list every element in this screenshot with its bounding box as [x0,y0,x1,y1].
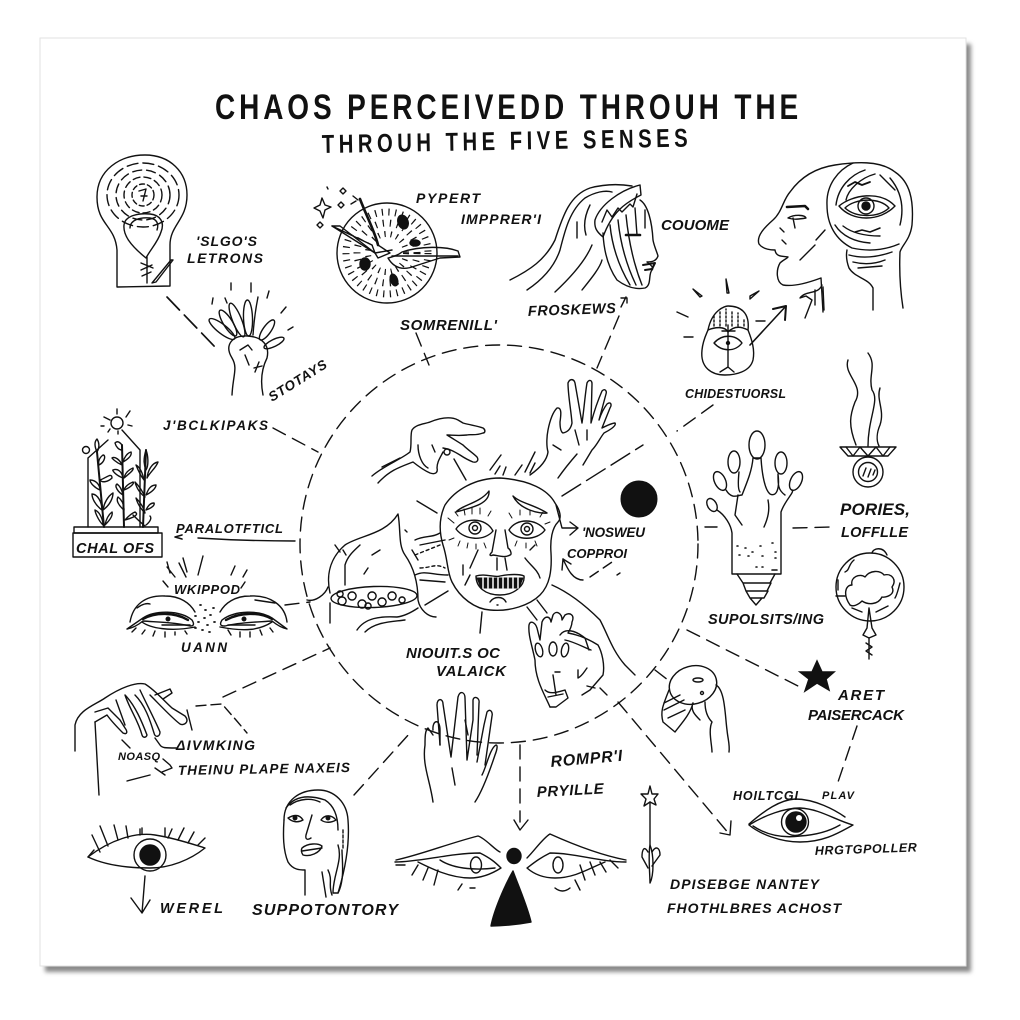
panel: plants in greenhouse [82,409,158,527]
label: pypert impprer'i [416,190,542,227]
icon: black star [800,661,834,691]
panel: twin eyes and triangle [395,834,626,926]
panel: dripping hand [705,431,805,605]
connector eyes to circle [285,602,310,605]
label: nioutit.soc valaick [406,645,507,680]
label: plav: PLAV [822,790,856,802]
label: pories, loffle [840,500,910,541]
label: supolsits/ing: SUPOLSITS/ING [708,612,824,628]
label: 'noswed coppro: 'NOSWEU [582,525,646,540]
connector left of hand [705,526,717,528]
connector chidestuorsl [677,405,713,431]
label box: chal ofs: CHAL OFS [76,541,154,557]
panel: lash eye [88,825,205,871]
panel: hand holding stone [662,660,729,752]
dashed central circle [300,345,698,743]
panel: open hand [424,693,497,802]
label: pories, loffle: PORIES, [840,500,910,519]
panel: big profile head with eye [758,163,912,318]
label: slgo's letrons: LETRONS [187,250,264,266]
panel: globe with cloud [836,549,904,659]
label: dpisebge nantey fhothlbres achost: DPISEBGE NANTEY [670,876,821,892]
label: pypert impprer'i: PYPERT [416,190,481,206]
panel: hand lower left [75,684,247,795]
panel: flower hand [207,283,293,395]
icon: black sun disc [621,481,657,517]
connector to star [687,630,800,687]
label: 'noswed coppro: COPPROI [567,546,627,561]
panel: top-left hand [372,418,485,483]
title: CHAOS PERCEIVEDD THROUH THE [215,87,798,127]
label: dpisebge nantey fhothlbres achost [667,876,842,916]
arrow: dashed down to central eyes [514,745,528,830]
arrow: dashed to eye [618,702,731,835]
arrow: froskews connector [597,297,627,368]
panel: bottom-right hands [527,585,635,707]
decorative rays around the face [417,445,643,633]
panel: smoke bowl [840,353,896,487]
panel: right eye [749,799,853,842]
label: j'bcklipaks: J'BCLKIPAKS [163,418,268,433]
panel: clock disc [314,187,460,303]
label: stotays: STOTAYS [266,357,330,405]
label: noasq: NOASQ [118,751,160,763]
label: wkippod: WKIPPOD [174,582,241,597]
label: hrgtgpoller: HRGTGPOLLER [815,840,917,858]
connector to stone hand [655,670,668,680]
arrow: paralotfticl [175,535,295,541]
connector bulb to flower hand [167,297,215,347]
connector pories [793,527,832,528]
label: aret paisercack: PAISERCACK [808,707,905,724]
panel: paired eyes [127,556,287,637]
panel: central face [440,478,578,610]
label: paralotfticl: PARALOTFTICL [176,521,283,536]
label: aret paisercack [808,687,905,724]
connector somrenill [416,333,429,365]
arrow: down from eye [131,876,150,913]
label: suppotontory: SUPPOTONTORY [252,902,399,919]
panel: woman face [283,790,348,897]
label: froskews: FROSKEWS [528,301,616,320]
label: 'noswed coppro [567,525,646,561]
label: werel: WEREL [160,901,223,917]
label: chidestuorsl: CHIDESTUORSL [685,387,786,401]
title: THROUH THE FIVE SENSES [322,123,688,159]
label: nioutit.soc valaick: NIOUIT.S OC [406,645,501,662]
label: somrenill': SOMRENILL' [400,317,497,334]
label: rompr'i pryille [536,748,624,801]
label: slgo's letrons: 'SLGO'S [196,233,258,249]
label: uann: UANN [181,640,227,655]
panel: bulb head with ripples [97,155,187,287]
label: hoiltcgi: HOILTCGI [733,789,799,803]
label: rompr'i pryille: ROMPR'I [550,748,624,771]
connector aret to eye [838,726,857,782]
label: slgo's letrons [187,233,264,266]
panel: onion and bun [307,514,448,632]
label: couome: COUOME [661,217,730,234]
label: dpisebge nantey fhothlbres achost: FHOTHLBRES ACHOST [667,900,842,916]
label: rompr'i pryille: PRYILLE [536,780,605,801]
label: theinu plape naxeis: THEINU PLAPE NAXEIS [178,760,350,778]
label: nioutit.soc valaick: VALAICK [436,663,507,680]
connector j'bcklipaks [273,428,318,452]
label box: chal ofs [73,527,162,557]
panel: top-right hand [530,380,615,478]
label: pypert impprer'i: IMPPRER'I [461,211,542,227]
panel: little eye-head figure [677,279,786,375]
panel: star wand [641,786,660,883]
connector hand to circle [223,648,330,697]
label: pories, loffle: LOFFLLE [841,525,909,541]
panel: veiled head [510,185,658,292]
title [215,87,798,159]
label: aret paisercack: ARET [837,687,886,704]
connector face to circle [354,733,410,795]
arrow: curved return to face [562,559,620,580]
label: sivumking: ΔIVMKING [175,737,255,753]
